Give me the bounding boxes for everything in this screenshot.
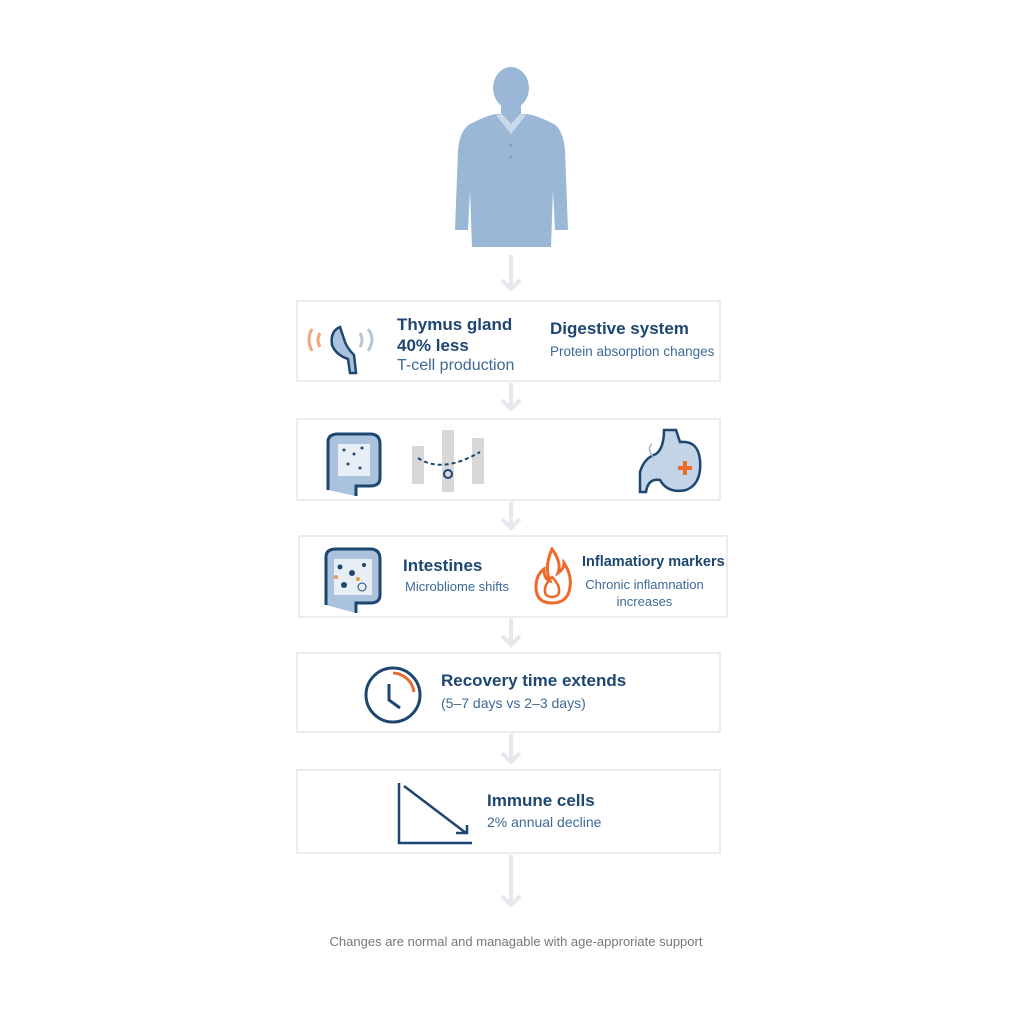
panel: immune cells (296, 769, 721, 854)
panel: recovery: (5–7 days vs 2–3 days) (441, 695, 586, 711)
person silhouette (455, 67, 568, 247)
panel: intestines and inflammation: Chronic inflamnation increases (585, 577, 704, 609)
icon: thymus (308, 325, 374, 374)
arrow 5 (500, 855, 522, 908)
icon: decline chart (398, 783, 472, 844)
icon: intestines (324, 548, 382, 613)
arrow 1 (500, 383, 522, 412)
panel: thymus and digestive (296, 300, 721, 382)
icon: flame (534, 547, 572, 604)
text: thymus: Thymus gland (397, 315, 512, 334)
panel: thymus and digestive: Protein absorption changes (550, 344, 714, 359)
icon: stomach (638, 428, 702, 494)
panel: intestines and inflammation: Microbliome shifts (405, 579, 509, 594)
icon: clock (364, 666, 422, 724)
text: intestines: Intestines (403, 556, 482, 575)
arrow 2 (500, 502, 522, 530)
arrow 0 (500, 255, 522, 292)
arrow 4 (500, 734, 522, 764)
text: immune: Immune cells (487, 791, 595, 810)
text: recovery: Recovery time extends (441, 671, 626, 690)
text: inflammation: Inflamatiory markers (582, 554, 725, 570)
panel: recovery (296, 652, 721, 733)
icon: colon (326, 432, 382, 496)
panel: thymus and digestive: 40% less (397, 336, 469, 355)
panel: immune cells: 2% annual decline (487, 814, 601, 830)
text: digestive: Digestive system (550, 319, 689, 338)
panel: icons row (296, 418, 721, 501)
footer text: Changes are normal and managable with age-approriate support (330, 934, 702, 949)
icon: cells graphic (412, 430, 484, 492)
arrow 3 (500, 619, 522, 648)
panel: intestines and inflammation (298, 535, 728, 618)
panel: thymus and digestive: T-cell production (397, 357, 514, 374)
